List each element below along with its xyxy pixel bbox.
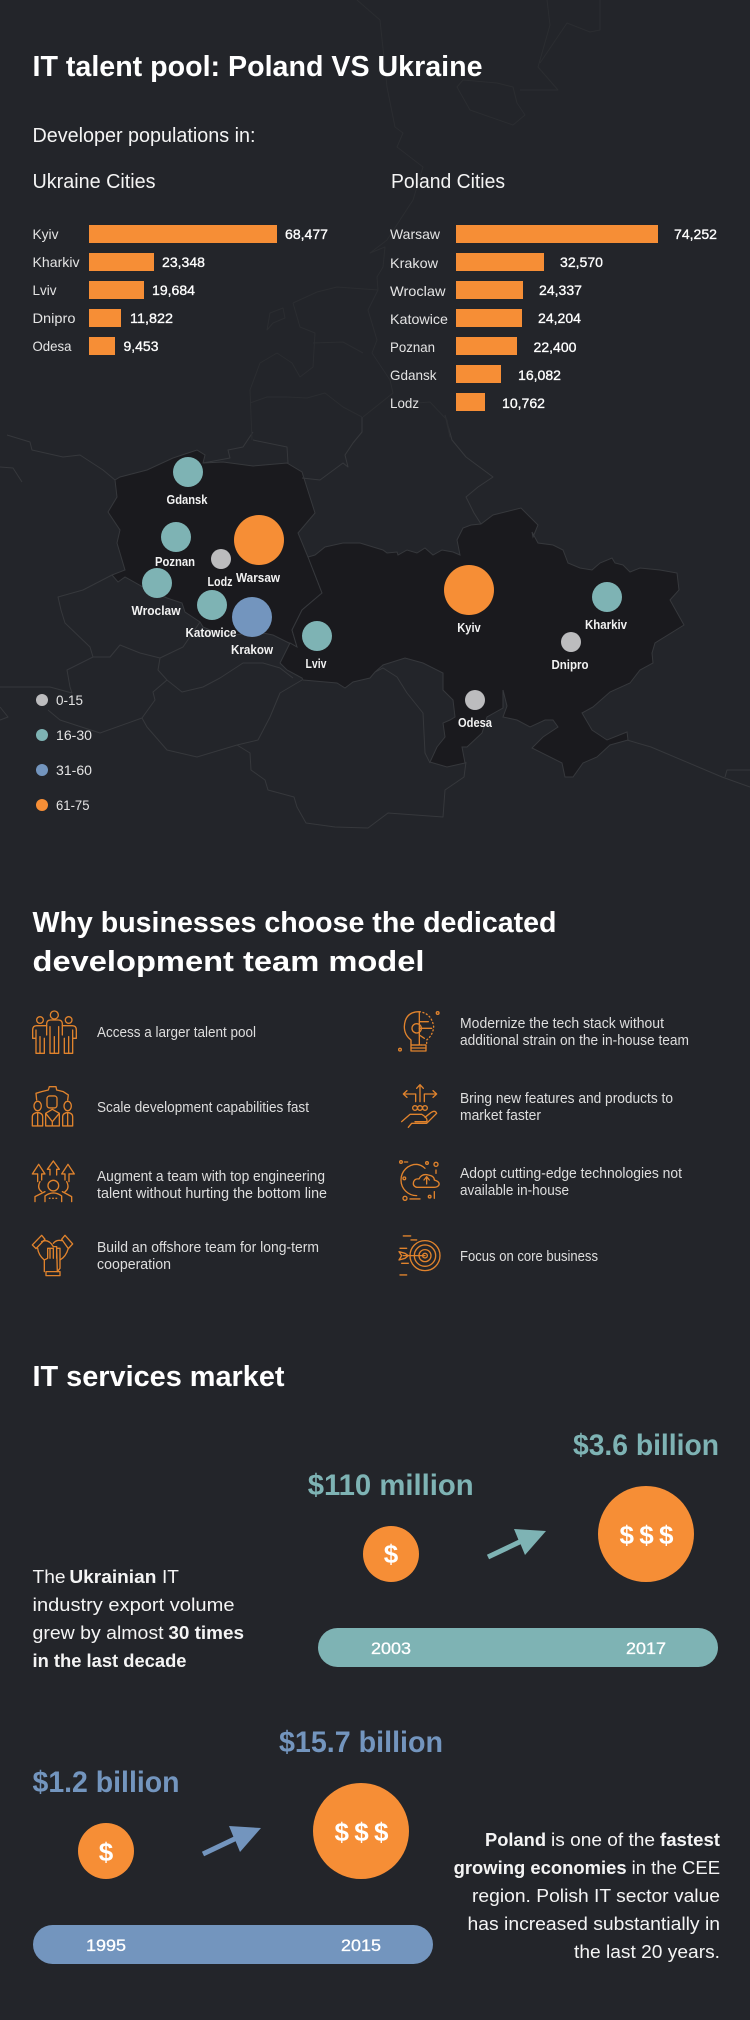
bar chart: Poland cities: Lodz xyxy=(390,395,419,411)
timeline bar 1995-2015 xyxy=(33,1925,433,1964)
bar chart: Ukraine cities xyxy=(32,171,328,355)
bubble: Poznan: Poznan xyxy=(155,555,195,569)
heading: Ukraine Cities: Ukraine Cities xyxy=(32,171,156,193)
bar chart: Ukraine cities: 68,477 xyxy=(285,226,328,242)
bubble: Odesa: Odesa xyxy=(458,716,493,730)
bar chart: Poland cities: Gdansk xyxy=(390,367,437,383)
bar chart: Ukraine cities: 23,348 xyxy=(162,254,205,270)
paragraph: Poland economy: fastest xyxy=(660,1829,720,1850)
bubble: Kyiv: Kyiv xyxy=(457,621,481,635)
bar chart: Poland cities: Poznan xyxy=(390,339,435,355)
bar chart: Poland cities: Katowice xyxy=(390,311,448,327)
bubble: Lodz: Lodz xyxy=(208,575,232,589)
text: new features: market faster xyxy=(460,1108,541,1124)
text: augment a team: talent without hurting the bottom line xyxy=(97,1186,327,1202)
bubble: Wroclaw xyxy=(132,568,181,618)
bar chart: Poland cities: 24,204 xyxy=(538,310,581,326)
bar chart: Ukraine cities: 19,684 xyxy=(152,282,195,298)
bubble: Gdansk xyxy=(166,457,208,507)
paragraph: Ukrainian IT export: IT xyxy=(162,1566,179,1587)
bubble: Wroclaw: Wroclaw xyxy=(132,604,181,618)
value: $1.2 billion: $1.2 billion xyxy=(32,1766,180,1799)
paragraph: Poland economy: has increased substantially in xyxy=(468,1913,720,1934)
paragraph: Poland economy: growing economies xyxy=(454,1857,627,1878)
bubble: Poznan xyxy=(155,522,195,569)
heading: IT services market: IT services market xyxy=(32,1361,285,1393)
bar chart: Poland cities: 22,400 xyxy=(534,339,577,355)
bar chart: Poland cities: 16,082 xyxy=(518,367,561,383)
value: $15.7 billion: $15.7 billion xyxy=(279,1726,443,1759)
text: access talent pool: Access a larger talent pool xyxy=(97,1025,256,1041)
bubble: Kharkiv xyxy=(585,582,627,632)
text: scale capabilities: Scale development capabilities fast xyxy=(97,1100,309,1116)
bubble: Kharkiv: Kharkiv xyxy=(585,618,627,632)
bubble: Warsaw xyxy=(234,515,284,585)
bubble: Katowice xyxy=(186,590,237,640)
page title: IT talent pool: Poland VS Ukraine xyxy=(32,51,482,83)
value: $3.6 billion: $3.6 billion xyxy=(573,1429,719,1462)
coin: large xyxy=(313,1783,409,1879)
bubble: Dnipro xyxy=(552,632,589,672)
icon: team of people xyxy=(33,1011,76,1053)
timeline bar 1995-2015: 2015 xyxy=(341,1936,381,1955)
paragraph: Ukrainian IT export: Ukrainian xyxy=(69,1566,156,1587)
country: Poland xyxy=(108,450,322,647)
paragraph: Poland economy: region. Polish IT sector value xyxy=(472,1885,720,1906)
benefits list: left column xyxy=(32,1011,327,1276)
coin: large: $$$ xyxy=(334,1817,389,1847)
map of Poland and Ukraine xyxy=(0,0,750,828)
text: cutting-edge technologies: available in-house xyxy=(460,1183,569,1199)
faint northern borders behind charts xyxy=(250,0,600,440)
text: cutting-edge technologies xyxy=(460,1166,682,1199)
bar chart: Ukraine cities: Kharkiv xyxy=(32,254,80,270)
benefits list: right column xyxy=(399,1012,689,1275)
icon: target with arrow xyxy=(399,1236,440,1275)
bubble: Lodz xyxy=(208,549,232,589)
text: augment a team: Augment a team with top engineering xyxy=(97,1169,325,1185)
map legend xyxy=(36,692,92,813)
bubble: Gdansk: Gdansk xyxy=(166,493,208,507)
text: new features xyxy=(460,1091,673,1124)
bar chart: Poland cities: Wroclaw xyxy=(390,283,446,299)
coin: small: $ xyxy=(99,1837,114,1867)
text: offshore team xyxy=(97,1240,319,1273)
heading: why businesses choose: Why businesses choose the dedicated xyxy=(32,907,556,939)
bubble: Katowice: Katowice xyxy=(186,626,237,640)
bar chart: Poland cities: 32,570 xyxy=(560,254,603,270)
coin: small xyxy=(363,1526,419,1582)
bubble: Warsaw: Warsaw xyxy=(236,571,280,585)
text: new features: Bring new features and products to xyxy=(460,1091,673,1107)
paragraph: Poland economy: in the CEE xyxy=(632,1857,720,1878)
icon: globe and cloud xyxy=(400,1161,439,1200)
value: $110 million: $110 million xyxy=(308,1469,474,1502)
bar chart: Poland cities: Warsaw xyxy=(390,226,441,242)
bar chart: Ukraine cities: Lviv xyxy=(32,282,56,298)
text: augment a team xyxy=(97,1169,327,1202)
coin: small xyxy=(78,1823,134,1879)
bar chart: Poland cities: Krakow xyxy=(390,255,439,271)
bubble: Krakow xyxy=(231,597,273,657)
heading: Poland Cities: Poland Cities xyxy=(391,171,505,193)
paragraph: Ukrainian IT export: in the last decade xyxy=(32,1650,186,1671)
city bubbles xyxy=(132,457,627,730)
paragraph: Poland economy: the last 20 years. xyxy=(574,1941,720,1962)
bubble: Kyiv xyxy=(444,565,494,635)
timeline bar 2003-2017: 2017 xyxy=(626,1639,666,1658)
text: modernize tech stack: Modernize the tech stack without xyxy=(460,1016,664,1032)
bar chart: Poland cities: 74,252 xyxy=(674,226,717,242)
coin: large xyxy=(598,1486,694,1582)
bar chart: Poland cities: 10,762 xyxy=(502,395,545,411)
text: modernize tech stack xyxy=(460,1016,689,1049)
panel: Ukraine market growth xyxy=(32,1429,719,1671)
text: offshore team: cooperation xyxy=(97,1257,171,1273)
coin: small: $ xyxy=(384,1539,399,1569)
paragraph: Poland economy xyxy=(454,1829,720,1962)
paragraph: Ukrainian IT export: industry export volume xyxy=(32,1594,234,1615)
paragraph: Poland economy: is one of the xyxy=(551,1829,655,1850)
bubble: Lviv: Lviv xyxy=(306,657,327,671)
heading: why businesses choose: development team model xyxy=(32,946,424,978)
text: modernize tech stack: additional strain on the in-house team xyxy=(460,1033,689,1049)
icon: team with gear xyxy=(32,1087,73,1126)
text: focus on core business: Focus on core business xyxy=(460,1249,598,1265)
bar chart: Ukraine cities: 11,822 xyxy=(130,310,173,326)
arrow: growth xyxy=(202,1826,261,1856)
map legend: 31-60 xyxy=(56,762,92,778)
bar chart: Ukraine cities: Dnipro xyxy=(32,310,76,326)
map legend: 16-30 xyxy=(56,727,92,743)
coin: large: $$$ xyxy=(620,1520,674,1550)
text: cutting-edge technologies: Adopt cutting-edge technologies not xyxy=(460,1166,682,1182)
bubble: Dnipro: Dnipro xyxy=(552,658,589,672)
paragraph: Ukrainian IT export: The xyxy=(32,1566,66,1587)
paragraph: Ukrainian IT export: grew by almost xyxy=(32,1622,164,1643)
neighbouring country borders xyxy=(0,415,750,828)
icon: hand with arrows xyxy=(402,1085,437,1127)
text: offshore team: Build an offshore team for long-term xyxy=(97,1240,319,1256)
icon: joined hands xyxy=(32,1235,73,1276)
bar chart: Ukraine cities: 9,453 xyxy=(124,338,159,354)
map legend: 0-15 xyxy=(56,692,83,708)
bubble: Lviv xyxy=(302,621,332,671)
bubble: Odesa xyxy=(458,690,493,730)
bar chart: Poland cities: 24,337 xyxy=(539,282,582,298)
bar chart: Ukraine cities: Kyiv xyxy=(32,226,58,242)
paragraph: Ukrainian IT export xyxy=(32,1566,244,1671)
timeline bar 2003-2017: 2003 xyxy=(371,1639,411,1658)
map legend: 61-75 xyxy=(56,797,90,813)
arrow: growth xyxy=(487,1529,546,1559)
bubble: Krakow: Krakow xyxy=(231,643,273,657)
panel: Poland market growth xyxy=(32,1726,720,1964)
icon: team with up arrows xyxy=(32,1161,74,1202)
paragraph: Ukrainian IT export: 30 times xyxy=(168,1622,244,1643)
heading: why businesses choose xyxy=(32,907,556,978)
subtitle: Developer populations in: xyxy=(32,125,256,147)
timeline bar 1995-2015: 1995 xyxy=(86,1936,126,1955)
country: Ukraine xyxy=(280,508,684,777)
paragraph: Poland economy: Poland xyxy=(485,1829,546,1850)
icon: light bulb with circuit xyxy=(399,1012,439,1051)
bar chart: Poland cities xyxy=(390,171,717,411)
bar chart: Ukraine cities: Odesa xyxy=(32,338,72,354)
timeline bar 2003-2017 xyxy=(318,1628,718,1667)
